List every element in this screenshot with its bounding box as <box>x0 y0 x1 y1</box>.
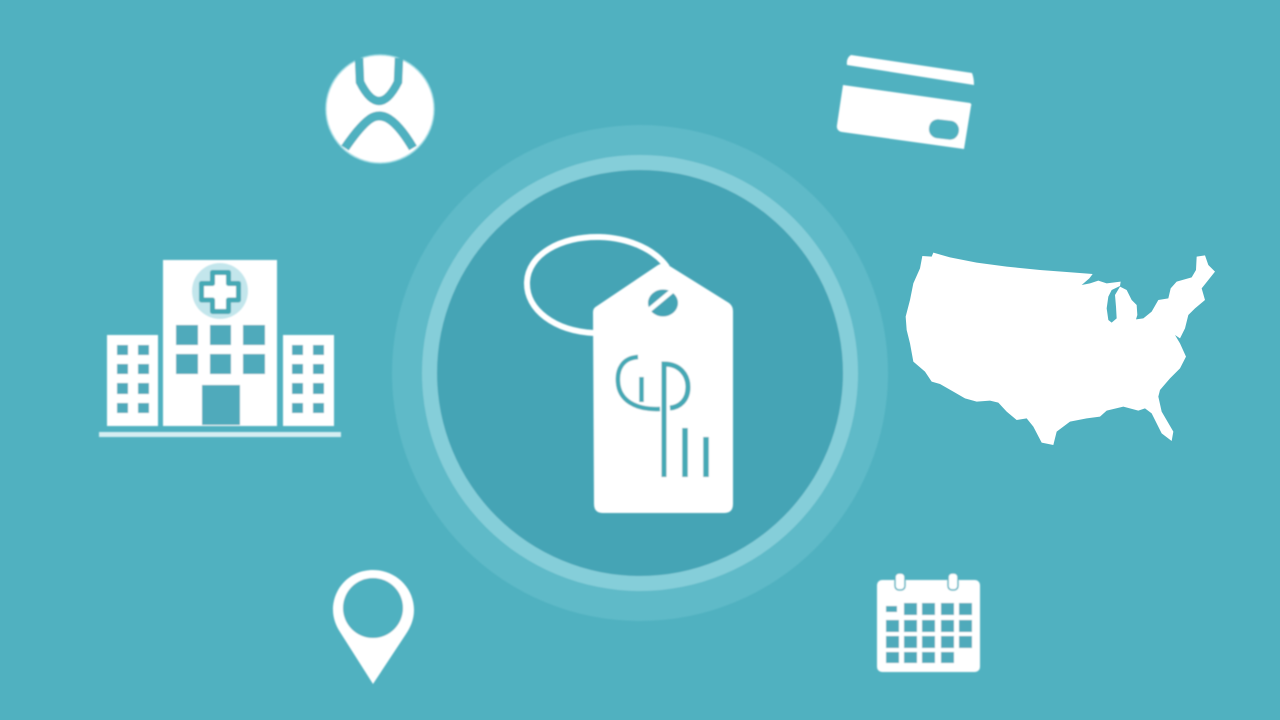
icon: price tag <box>527 237 733 513</box>
central ring graphic <box>392 125 888 621</box>
icon: map of the United States <box>906 253 1215 445</box>
icon: credit card <box>837 55 974 149</box>
icon: calendar <box>877 573 980 672</box>
icon: doctor avatar <box>326 55 434 163</box>
icon: location pin <box>333 570 414 684</box>
icon: hospital <box>99 260 341 437</box>
